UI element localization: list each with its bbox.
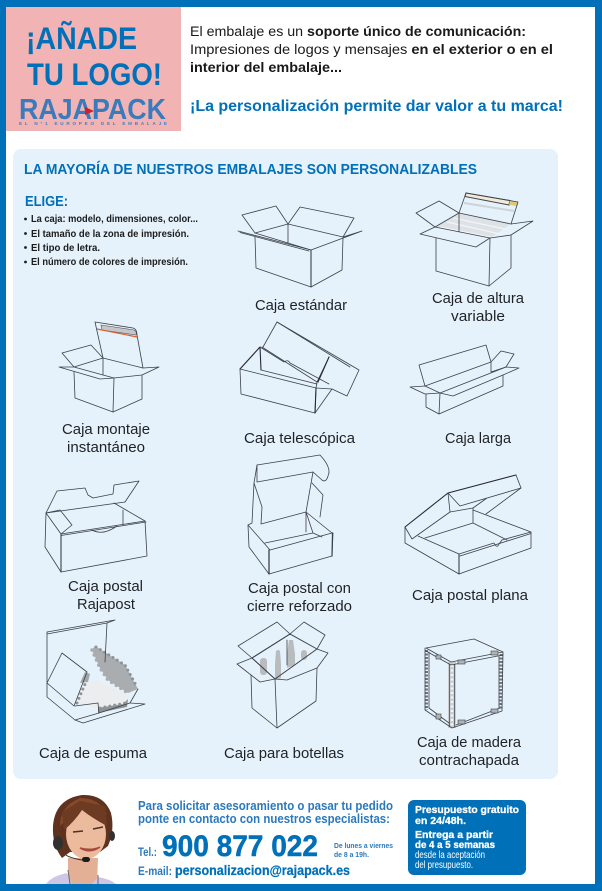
opening hours xyxy=(334,843,393,859)
callout: quote and delivery: Presupuesto gratuito xyxy=(415,804,519,816)
panel heading: LA MAYORÍA DE NUESTROS EMBALAJES SON PERSONALIZABLES xyxy=(24,161,477,178)
caption xyxy=(68,579,143,613)
caption: Caja postal xyxy=(68,579,143,595)
heading: add your logo: TU LOGO! xyxy=(27,56,162,92)
icon: reinforced closure mailer xyxy=(248,455,333,574)
contact invitation: ponte en contacto con nuestros especialistas: xyxy=(138,812,390,826)
card: caja telescópica xyxy=(240,322,359,447)
email: personalizacion@rajapack.es xyxy=(175,863,350,878)
intro text xyxy=(190,24,553,76)
heading: add your logo xyxy=(26,20,162,92)
panel: customisable boxes xyxy=(13,149,558,779)
choose list: ELIGE: xyxy=(25,194,68,210)
caption: Caja postal con xyxy=(248,581,351,597)
icon: instant assembly box xyxy=(59,322,159,412)
icon: bottle box xyxy=(237,622,328,728)
card: caja de altura variable xyxy=(416,193,533,325)
callout: quote and delivery: de 4 a 5 semanas xyxy=(415,839,495,851)
card: caja postal Rajapost xyxy=(45,481,147,613)
choose list xyxy=(24,194,198,268)
intro text: El embalaje es un soporte único de comunicación: xyxy=(190,24,526,40)
callout: quote and delivery xyxy=(408,800,526,875)
photo: call-centre agent xyxy=(46,795,116,884)
caption: Caja larga xyxy=(445,431,512,447)
opening hours: De lunes a viernes xyxy=(334,843,393,850)
caption: Rajapost xyxy=(77,597,135,613)
caption xyxy=(62,422,150,456)
icon: Rajapost mailer xyxy=(45,481,147,572)
Rajapack logo: EL N°1 EUROPEO DEL EMBALAJE xyxy=(19,121,167,126)
choose list: El tamaño de la zona de impresión. xyxy=(31,228,189,240)
caption: Caja para botellas xyxy=(224,746,344,762)
opening hours: de 8 a 19h. xyxy=(334,852,369,859)
callout: quote and delivery: del presupuesto. xyxy=(415,859,473,871)
caption: variable xyxy=(451,309,505,325)
icon: foam box xyxy=(47,620,145,723)
caption xyxy=(417,735,522,769)
choose list: El número de colores de impresión. xyxy=(31,256,188,268)
caption: Caja telescópica xyxy=(244,431,356,447)
card: caja de espuma xyxy=(39,620,148,762)
icon: long box xyxy=(410,345,519,414)
intro text: Impresiones de logos y mensajes en el exterior o en el xyxy=(190,42,553,58)
header logo block xyxy=(6,7,181,131)
contact invitation xyxy=(138,799,393,826)
card: caja estándar xyxy=(238,206,362,314)
choose list: La caja: modelo, dimensiones, color... xyxy=(31,213,198,225)
heading: add your logo: ¡AÑADE xyxy=(26,20,137,56)
blue tagline: ¡La personalización permite dar valor a tu marca! xyxy=(190,98,563,115)
icon: flat mailer xyxy=(405,475,531,574)
caption: Caja estándar xyxy=(255,298,347,314)
icon: variable height box xyxy=(416,193,533,286)
card: caja postal plana xyxy=(405,475,531,604)
callout: quote and delivery: en 24/48h. xyxy=(415,815,466,827)
card: caja montaje instantáneo xyxy=(59,322,159,456)
email: E-mail: xyxy=(138,864,172,878)
caption: Caja postal plana xyxy=(412,588,529,604)
icon: telescopic box xyxy=(240,322,359,413)
card: caja larga xyxy=(410,345,519,447)
caption: Caja montaje xyxy=(62,422,150,438)
caption: Caja de altura xyxy=(432,291,525,307)
caption xyxy=(432,291,525,325)
card: caja de madera contrachapada xyxy=(417,639,522,769)
intro text: interior del embalaje... xyxy=(190,60,342,76)
caption: Caja de espuma xyxy=(39,746,148,762)
icon: plywood crate xyxy=(425,639,503,728)
card: caja postal con cierre reforzado xyxy=(247,455,352,615)
contact block xyxy=(138,799,393,878)
Rajapack logo: RAJAPACK xyxy=(19,94,166,126)
phone number: Tel.: xyxy=(138,847,157,859)
card: caja para botellas xyxy=(224,622,344,762)
choose list: El tipo de letra. xyxy=(31,242,100,254)
callout: quote and delivery: desde la aceptación xyxy=(415,849,485,861)
caption: instantáneo xyxy=(67,440,145,456)
caption: contrachapada xyxy=(419,753,520,769)
icon: standard box xyxy=(238,206,362,287)
caption: cierre reforzado xyxy=(247,599,352,615)
caption xyxy=(247,581,352,615)
caption: Caja de madera xyxy=(417,735,522,751)
callout: quote and delivery: Entrega a partir xyxy=(415,829,493,841)
phone number: 900 877 022 xyxy=(162,830,318,863)
contact invitation: Para solicitar asesoramiento o pasar tu pedido xyxy=(138,799,393,813)
